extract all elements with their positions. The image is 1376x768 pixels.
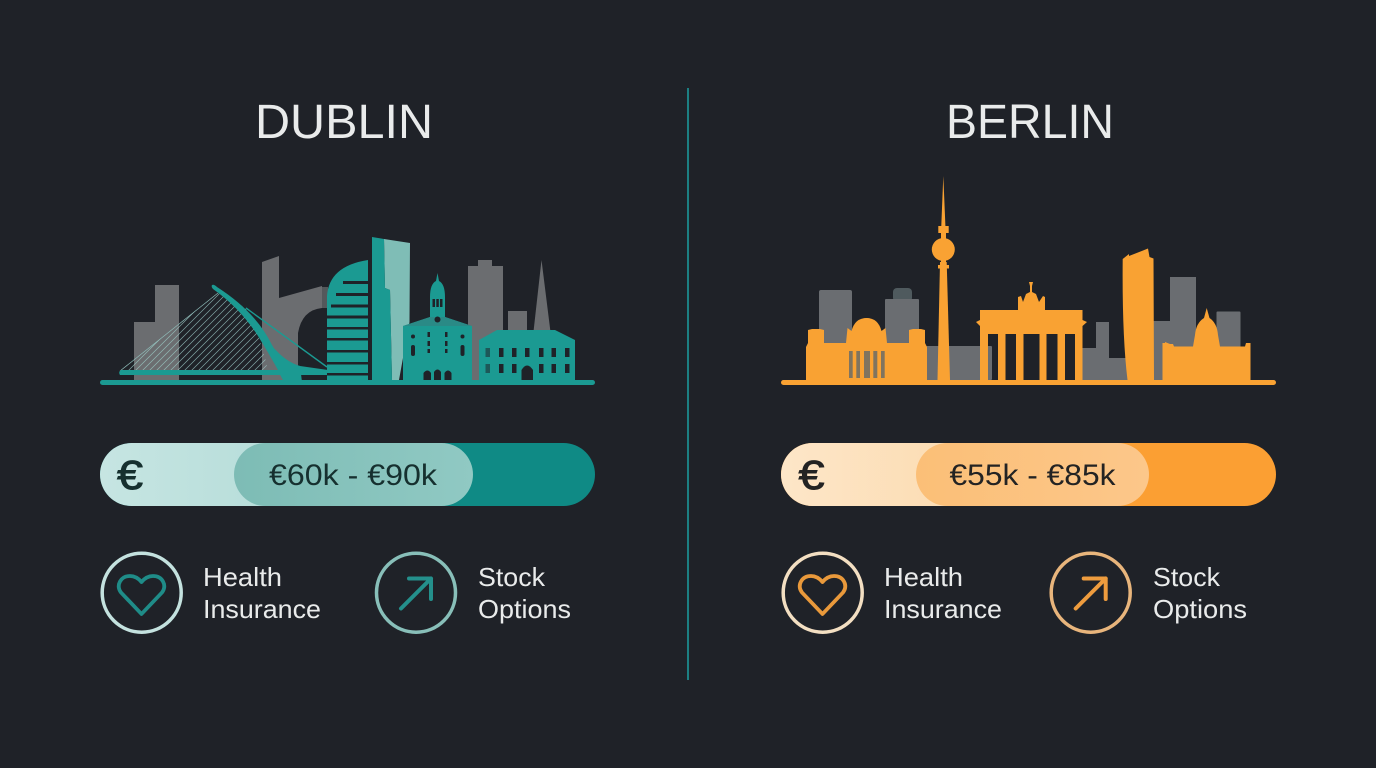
icon: heart (783, 553, 862, 632)
label: Insurance (203, 594, 321, 624)
ground line (781, 380, 1276, 385)
benefit: health insurance (102, 553, 321, 632)
glass tower (372, 237, 410, 380)
icon: heart (102, 553, 181, 632)
label: Stock (1153, 562, 1221, 592)
label (884, 562, 1002, 624)
ground line (100, 380, 595, 385)
benefit: stock options (376, 553, 571, 632)
panel: Berlin (781, 176, 1276, 632)
label: Options (478, 594, 571, 624)
gray background buildings (134, 256, 551, 380)
icon: arrow (1051, 553, 1130, 632)
label: Stock (478, 562, 546, 592)
center divider (687, 88, 689, 680)
salary range bar (781, 443, 1276, 506)
benefit: health insurance (783, 553, 1002, 632)
euro icon: € (798, 452, 825, 498)
label: Health (884, 562, 963, 592)
Berlin skyline illustration (781, 176, 1276, 385)
label: Health (203, 562, 282, 592)
benefit: stock options (1051, 553, 1247, 632)
church with clock tower (403, 273, 472, 380)
salary value: €55k - €85k (950, 459, 1117, 492)
TV tower (932, 176, 955, 380)
curved striped tower (327, 260, 368, 380)
label: Insurance (884, 594, 1002, 624)
euro icon: € (117, 452, 143, 498)
modern tower (1123, 248, 1154, 380)
Dublin skyline illustration (100, 237, 595, 385)
label (203, 562, 321, 624)
salary value: €60k - €90k (269, 459, 438, 492)
label (478, 562, 571, 624)
low civic building (479, 330, 575, 380)
label (1153, 562, 1247, 624)
Reichstag (806, 318, 927, 380)
icon: arrow (376, 553, 456, 632)
gray background buildings (819, 277, 1240, 380)
Samuel Beckett Bridge (119, 284, 327, 380)
domed building (1162, 308, 1250, 380)
panel: Dublin (100, 237, 595, 632)
title: Berlin: BERLIN (946, 96, 1114, 149)
title: Dublin: DUBLIN (255, 96, 433, 149)
label: Options (1153, 594, 1247, 624)
salary range bar (100, 443, 595, 506)
Brandenburg Gate (976, 282, 1087, 380)
